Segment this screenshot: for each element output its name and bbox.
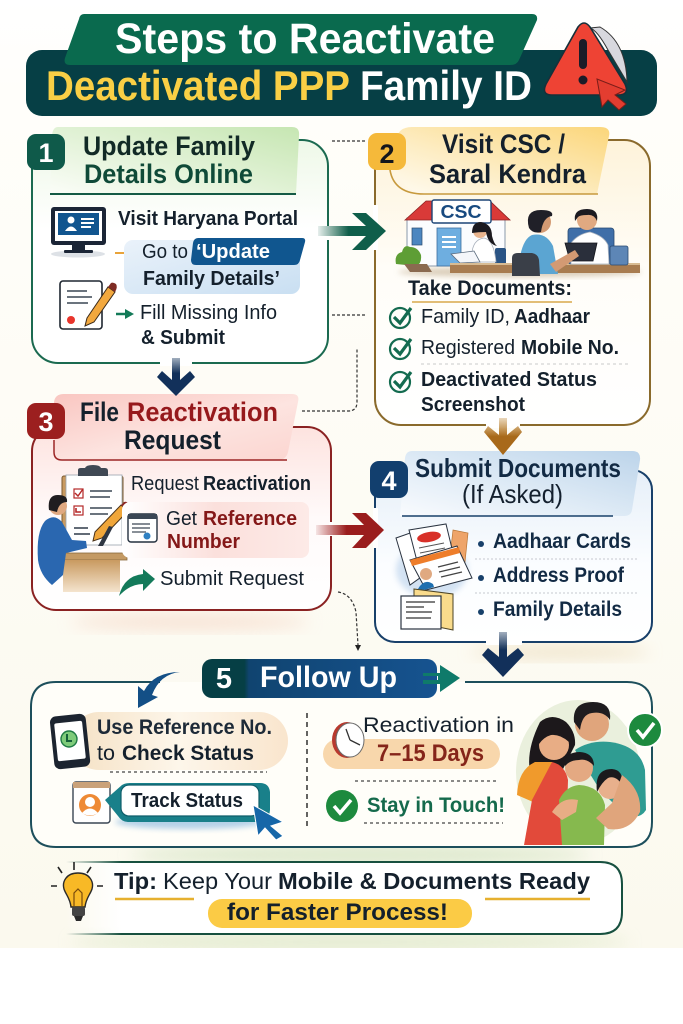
text: request reactivation: Request [131,473,199,495]
badge: 1: 1 [38,138,54,168]
panel 4 header: Submit Documents [415,453,621,483]
panel 3 header [54,394,298,460]
callout: update family details: Go to [142,241,188,263]
dotted links between panels [302,141,366,645]
callout: get reference number [122,502,309,558]
heading pill: follow up: Follow Up [260,661,397,694]
panel 2 header [390,127,609,194]
arrow: blue curved [138,672,180,708]
icon: document and pencil [60,281,117,329]
callout: get reference number: Reference [203,508,297,530]
girl [598,775,622,799]
panel: step 3 file reactivation request [27,394,331,610]
connector arrows and dotted links [157,141,524,677]
item: family id and aadhaar: Family ID, [421,306,510,328]
panel 1 header: Update Family [83,131,255,161]
icon: light bulb [51,862,103,921]
callout: stay in touch [326,790,505,822]
text: request reactivation: Reactivation [203,473,311,495]
illustration: person filling clipboard [38,465,129,592]
arrow: fill info [116,309,134,319]
tip highlight pill: for Faster Process! [227,899,448,926]
text: fill missing info: & Submit [141,327,225,349]
checklist: documents to take [390,306,631,416]
badge: 4 [370,461,408,498]
arrow: step 1 to step 3 [157,358,195,396]
callout: update family details [124,238,305,294]
item: family id and aadhaar [390,306,590,328]
callout: use reference number: Use Reference No. [97,716,272,739]
illustration: CSC centre with staff and visitor [396,200,642,277]
callout: update family details: ‘Update [196,241,270,263]
button: track status: Track Status [131,790,243,812]
callout: reactivation time [323,714,514,769]
icon: clock [332,722,364,758]
page background [0,310,683,948]
tip banner [51,862,622,934]
badge: 1 [27,134,65,170]
illustration: happy family [516,700,646,845]
panel: step 4 submit documents [370,451,652,642]
callout: use reference number: Check Status [122,742,254,765]
button: track status [105,783,270,829]
panel 1 header: Details Online [84,159,253,189]
callout: stay in touch: Stay in Touch! [367,794,505,817]
panel 4 header: (If Asked) [462,479,563,509]
item: registered mobile number: Registered [421,337,515,359]
title line 2: Family ID [360,62,532,109]
panel 3 header: Request [124,425,221,455]
text: take documents: Take Documents: [408,277,572,300]
arrow: step 1 to step 2 [318,205,386,250]
arrow: submit swoosh [119,569,155,596]
icon: phone [49,713,91,770]
icon: profile card [73,782,110,823]
panel 3 header: Reactivation [127,397,278,427]
arrowhead: dotted link [355,645,361,651]
panel 2 header: Saral Kendra [429,159,587,189]
tip text line 1 [114,868,590,894]
item: deactivated status screenshot: Screenshot [421,394,525,416]
boy [559,785,605,845]
text: fill missing info: Fill Missing Info [140,302,277,324]
tip text line 1: Tip: [114,868,157,894]
text: submit request: Submit Request [160,568,304,590]
icon: cursor [253,805,283,840]
badge: 3: 3 [38,407,54,437]
tip text line 1: Keep Your [163,868,272,894]
panel 4 header [400,451,640,516]
illustration: CSC centre with staff and visitor: CSC [440,202,482,222]
callout: reactivation time: Reactivation in [363,714,514,737]
arrow: step 2 to step 4 [484,418,522,455]
text: fill missing info [140,302,277,349]
arrow: step 4 to step 5 [482,632,524,677]
callout: use reference number [49,712,288,770]
arrow: teal right [423,665,460,692]
panel 2 header: Visit CSC / [442,129,565,159]
item: registered mobile number: Mobile No. [521,337,619,359]
heading pill: follow up [202,659,437,698]
badge: 4: 4 [381,466,397,496]
badge: 2: 2 [379,139,395,169]
arrow: step 3 to step 4 [316,508,384,548]
callout: get reference number: Number [167,531,240,553]
item: registered mobile number [390,337,619,359]
item: deactivated status screenshot: Deactivated Status [421,369,597,391]
item: aadhaar cards: Aadhaar Cards [493,530,631,553]
icon: document stack with id card [396,524,472,630]
item: address proof: Address Proof [493,564,625,587]
item: family id and aadhaar: Aadhaar [514,306,590,328]
man [575,742,646,817]
icon: computer monitor [51,207,106,258]
text: visit portal: Visit Haryana Portal [118,208,298,230]
hands and arm [596,775,640,829]
item: family details: Family Details [493,598,622,621]
panel: step 5 follow up [31,659,662,847]
callout: reactivation time: 7–15 Days [377,740,484,767]
panel: step 2 visit CSC [368,127,650,425]
callout: update family details: Family Details’ [143,268,280,290]
panel 1 header [50,127,299,194]
title line 2: Deactivated PPP [46,62,350,109]
tip text line 1: Mobile & Documents Ready [278,868,590,894]
list: document types [475,530,638,621]
callout: use reference number: to [97,742,115,765]
text: request reactivation [131,473,311,495]
title line 1: Steps to Reactivate [115,15,495,63]
woman [529,717,575,775]
callout: get reference number: Get [166,508,197,530]
badge: 3 [27,403,65,439]
icon: warning triangle with cursor [544,23,627,110]
panel: step 1 update family details [27,127,328,363]
item: deactivated status screenshot [390,369,597,416]
title banner [26,14,657,116]
heading pill: follow up: 5 [216,663,232,695]
icon: green check badge [628,713,662,747]
arrow: to update family details [115,249,134,257]
badge: 2 [368,133,406,170]
panel 3 header: File [80,397,119,427]
